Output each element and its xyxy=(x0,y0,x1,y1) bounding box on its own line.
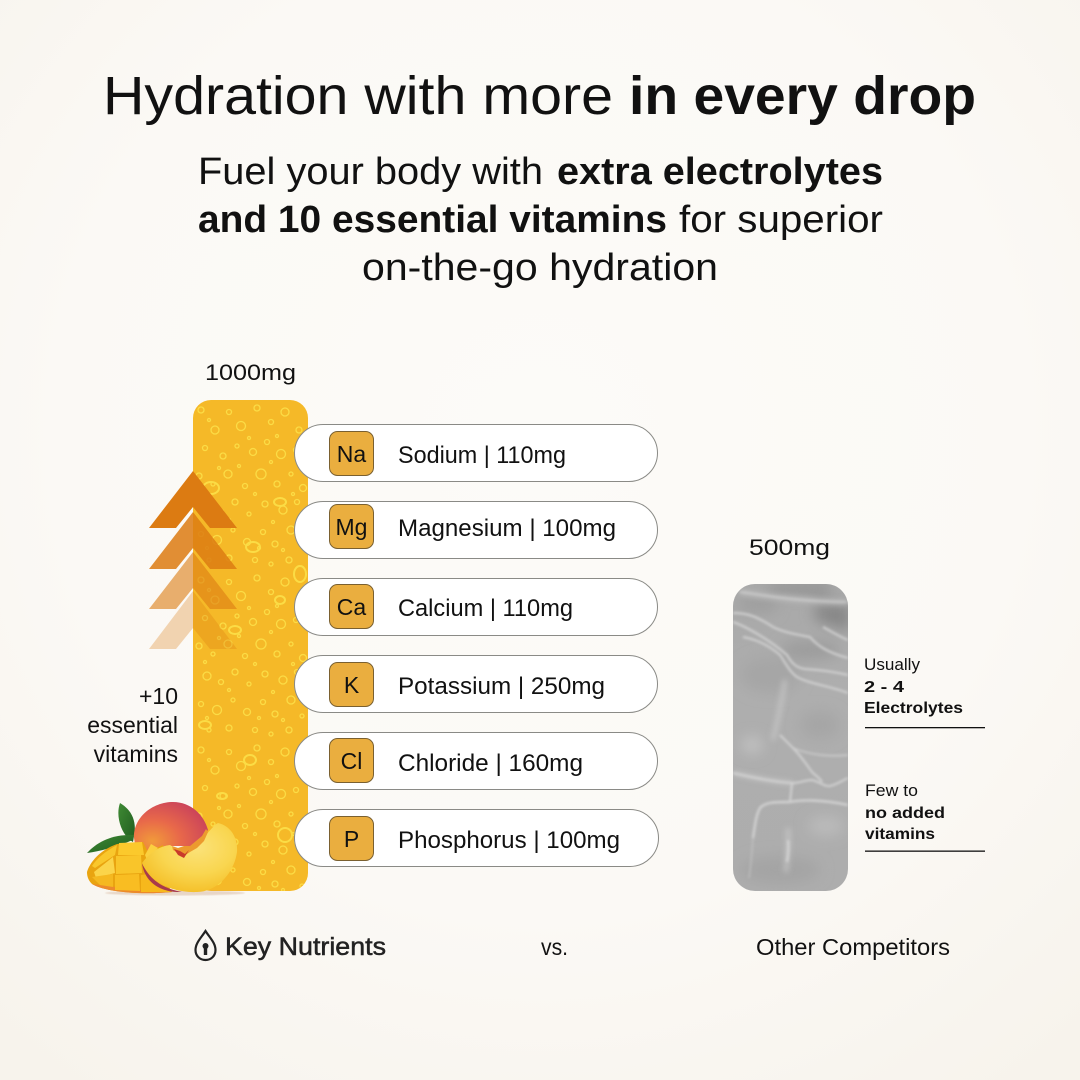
electrolyte: potassium: Potassium | 250mg xyxy=(398,673,605,700)
electrolyte: chloride: Chloride | 160mg xyxy=(398,750,583,777)
electrolyte: magnesium: Magnesium | 100mg xyxy=(398,515,616,542)
label: key nutrients: Key Nutrients xyxy=(225,933,386,961)
electrolyte: phosphorus: P xyxy=(344,826,359,852)
arrows: upward chevrons xyxy=(149,471,237,649)
title: Hydration with more xyxy=(103,66,613,126)
callout: vitamins: no added xyxy=(865,805,945,822)
icon: mango and peach fruit xyxy=(87,802,245,896)
subtitle xyxy=(198,151,883,289)
title: in every drop xyxy=(629,66,976,126)
callout: electrolytes: Usually xyxy=(864,655,920,674)
electrolyte: magnesium: Mg xyxy=(336,514,367,540)
bar: key nutrients 1000mg xyxy=(193,400,308,891)
subtitle: extra electrolytes xyxy=(557,151,883,193)
callout: electrolytes xyxy=(864,655,985,728)
bar: other competitors 500mg xyxy=(733,584,850,891)
electrolyte: calcium xyxy=(294,578,658,636)
electrolyte: chloride xyxy=(294,732,658,790)
electrolyte: calcium: Ca xyxy=(337,594,366,620)
subtitle: for superior xyxy=(679,199,883,241)
title xyxy=(103,66,976,126)
callout: vitamins xyxy=(865,781,985,852)
label: other competitors: Other Competitors xyxy=(756,934,950,960)
subtitle: Fuel your body with xyxy=(198,151,543,193)
label: vs.: vs. xyxy=(541,934,568,960)
electrolyte: calcium: Calcium | 110mg xyxy=(398,595,573,622)
label: +10 essential vitamins: essential xyxy=(87,712,178,738)
electrolyte: potassium xyxy=(294,656,658,712)
electrolyte: sodium xyxy=(294,424,658,482)
electrolyte: phosphorus xyxy=(294,810,658,866)
subtitle: and 10 essential vitamins xyxy=(198,199,667,241)
electrolyte: sodium: Sodium | 110mg xyxy=(398,442,566,469)
subtitle: on-the-go hydration xyxy=(362,247,718,289)
label: 1000mg: 1000mg xyxy=(205,360,296,385)
label: +10 essential vitamins xyxy=(87,683,178,767)
electrolyte: potassium: K xyxy=(344,672,360,698)
icon: key nutrients drop logo xyxy=(196,931,216,960)
electrolyte: chloride: Cl xyxy=(341,748,362,774)
callout: vitamins: Few to xyxy=(865,781,918,800)
label: +10 essential vitamins: +10 xyxy=(139,683,178,709)
callout: vitamins: vitamins xyxy=(865,826,935,843)
callout: electrolytes: Electrolytes xyxy=(864,700,963,717)
label: 500mg: 500mg xyxy=(749,535,830,560)
callout: electrolytes: 2 - 4 xyxy=(864,679,904,696)
electrolyte: phosphorus: Phosphorus | 100mg xyxy=(398,827,620,854)
label: +10 essential vitamins: vitamins xyxy=(94,741,178,767)
electrolyte: sodium: Na xyxy=(337,441,366,467)
electrolyte: magnesium xyxy=(294,502,658,558)
